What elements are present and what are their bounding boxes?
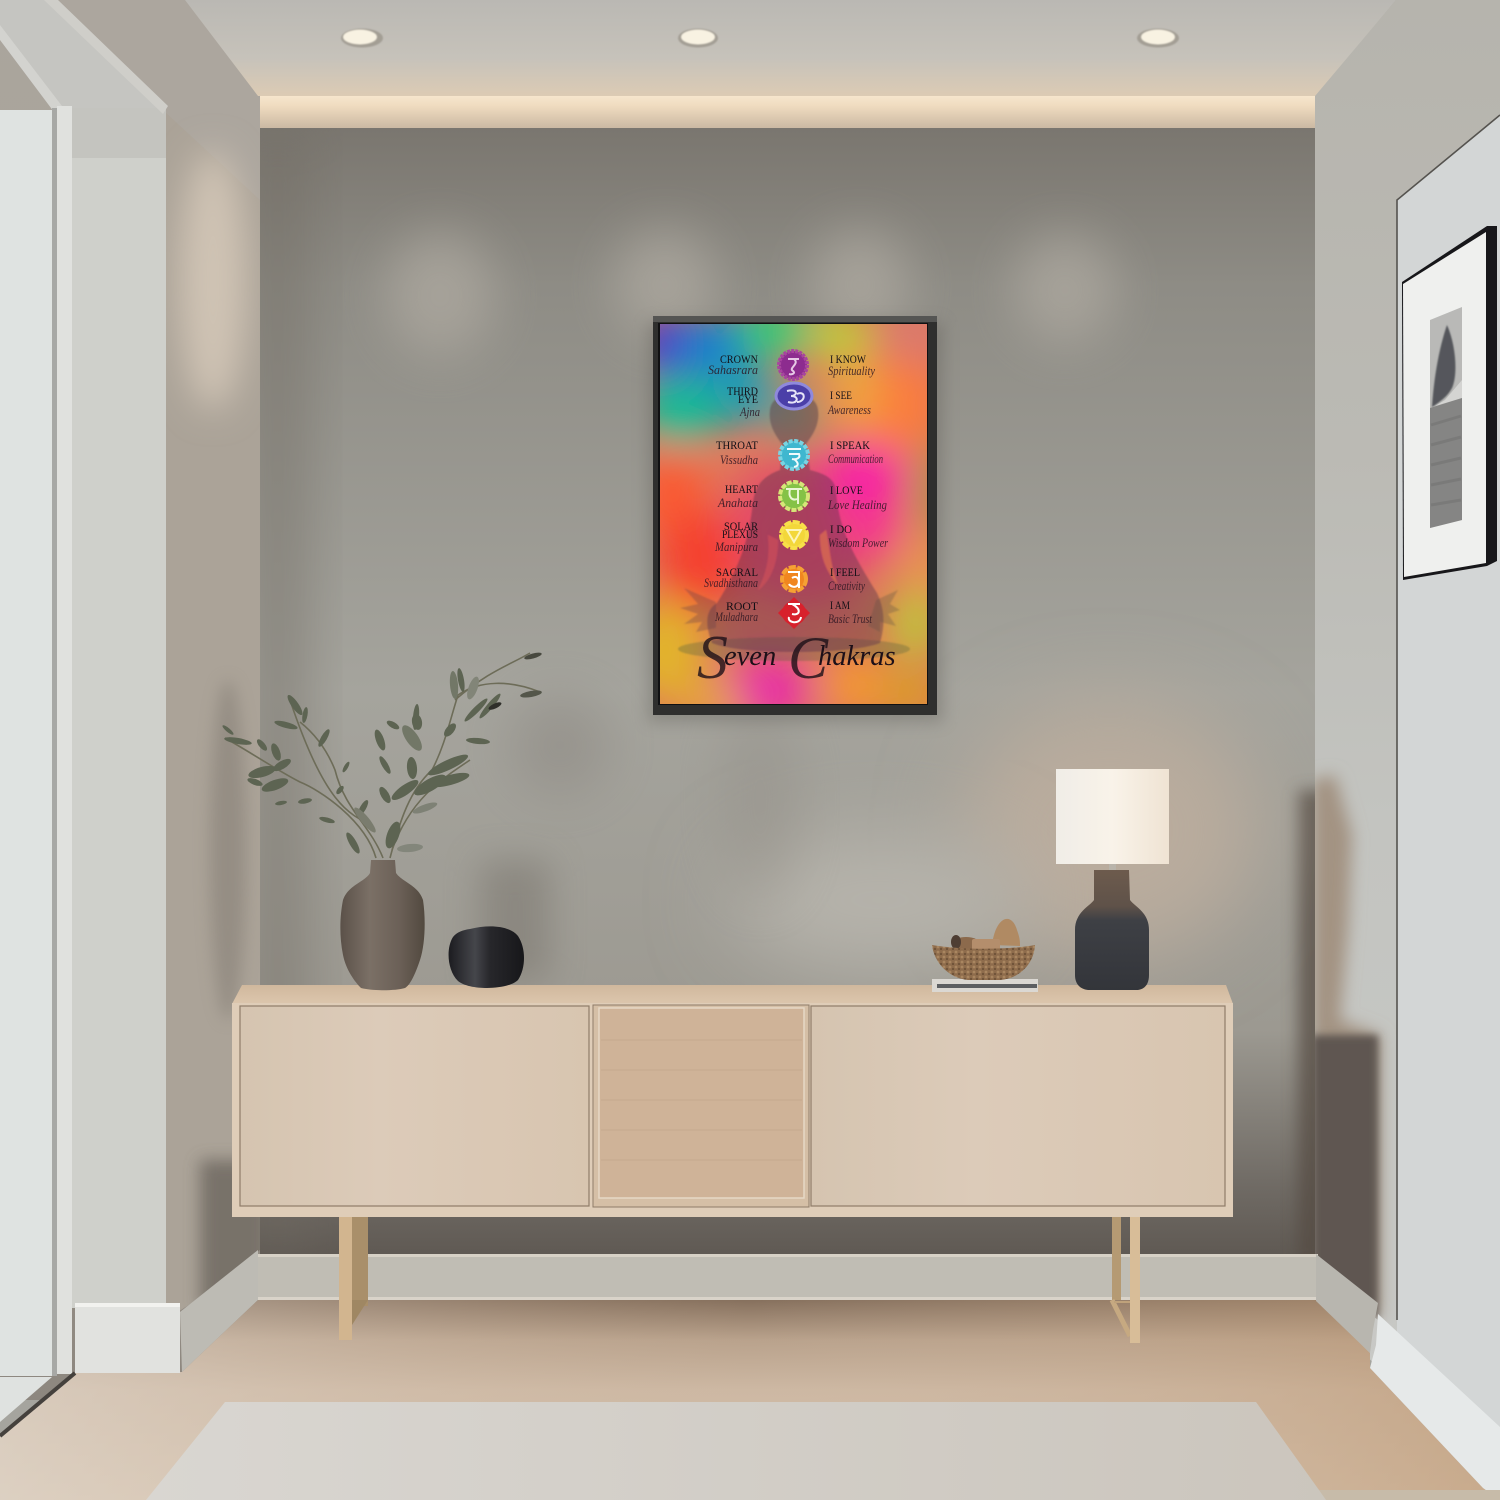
window reveal [0, 0, 168, 1308]
bowl contents [951, 919, 1020, 952]
framed print on right wall [1402, 226, 1497, 580]
floor [0, 1300, 1500, 1500]
poster: seven chakras [660, 324, 927, 704]
label: throat: THROAT [716, 440, 758, 452]
ceiling light 1 [341, 28, 383, 48]
label: I love [827, 485, 887, 512]
soffit above window reveal [0, 0, 165, 112]
left door [240, 1006, 589, 1206]
centre slatted door [593, 1005, 809, 1207]
chakra: third eye [776, 383, 812, 409]
chakra: root [778, 597, 810, 629]
title: Seven Chakras: hakras [818, 641, 896, 672]
label: throat: Vissudha [720, 452, 758, 467]
label: I see [828, 392, 871, 414]
ceiling [185, 0, 1396, 96]
rug [146, 1402, 1500, 1500]
title: Seven Chakras: C [788, 625, 829, 691]
label: crown [708, 356, 758, 374]
label: I do: Wisdom Power [828, 535, 889, 550]
ceiling light 3 [1137, 28, 1179, 48]
table lamp [1056, 769, 1169, 990]
label: I see: Awareness [827, 402, 871, 417]
label: solar plexus: SOLAR [724, 521, 758, 533]
label: I know: I KNOW [830, 354, 866, 366]
side baseboard left [180, 1250, 258, 1372]
label: sacral: SACRAL [716, 567, 758, 579]
window [0, 106, 72, 1422]
poster frame [648, 316, 943, 722]
label: I speak: Communication [828, 451, 883, 466]
label: I am: I AM [830, 600, 850, 612]
bowl and books [932, 919, 1038, 992]
back wall baseboard [258, 1254, 1318, 1300]
left wall trim base [75, 1303, 180, 1373]
light cove strip [260, 96, 1316, 128]
branches [225, 653, 540, 858]
sideboard body [232, 1003, 1233, 1217]
title: Seven Chakras: S [697, 624, 728, 692]
chakra: heart [780, 482, 808, 510]
label: throat [716, 442, 758, 464]
chakra: crown [779, 351, 807, 379]
label: root: ROOT [726, 601, 758, 613]
right wall [1312, 0, 1500, 1500]
label: I see: I SEE [830, 390, 852, 402]
label: third eye: Ajna [739, 404, 760, 419]
sideboard top [232, 985, 1233, 1004]
left labels [704, 354, 760, 624]
label: sacral: Svadhisthana [704, 575, 758, 590]
label: I do: I DO [830, 524, 852, 536]
lampshade [1056, 769, 1169, 864]
poster gradient background [660, 324, 927, 704]
right door [811, 1006, 1225, 1206]
label: root: Muladhara [714, 609, 758, 624]
label: heart: Anahata [717, 495, 758, 510]
woven bowl [932, 945, 1035, 980]
label: root [714, 602, 758, 621]
label: I speak: I SPEAK [830, 440, 871, 452]
books [932, 979, 1038, 992]
back wall [245, 128, 1338, 1265]
label: I know [828, 354, 875, 378]
label: heart: HEART [725, 484, 758, 496]
label: third eye: EYE [738, 394, 758, 406]
label: heart [717, 486, 758, 507]
label: I am [828, 602, 872, 623]
label: I speak [828, 442, 883, 463]
label: third eye [727, 386, 760, 419]
label: solar plexus [714, 521, 758, 554]
label: solar plexus: Manipura [714, 539, 758, 554]
left wall [0, 128, 260, 1400]
right white baseboard [1370, 1314, 1500, 1500]
side baseboard right [1316, 1254, 1378, 1353]
label: I do [828, 526, 888, 547]
chakra: solar plexus [781, 522, 807, 548]
label: I love: Love Healing [827, 497, 887, 512]
label: third eye: THIRD [727, 386, 758, 398]
label: sacral [704, 568, 758, 587]
label: I feel: Creativity [828, 578, 865, 593]
ceiling light 2 [678, 28, 718, 48]
label: solar plexus: PLEXUS [722, 529, 758, 541]
label: crown: CROWN [720, 354, 759, 366]
meditating silhouette [678, 394, 910, 661]
chakra: sacral [782, 567, 806, 591]
label: I feel: I FEEL [830, 567, 860, 579]
chakra: throat [780, 441, 808, 469]
vase body [340, 860, 425, 990]
right labels [827, 354, 889, 626]
label: I know: Spirituality [828, 363, 875, 378]
label: crown: Sahasrara [708, 362, 758, 377]
black ceramic orb [449, 926, 524, 988]
sideboard [232, 985, 1233, 1343]
label: I feel [828, 567, 865, 593]
label: I am: Basic Trust [828, 611, 872, 626]
title: Seven Chakras: even [724, 641, 776, 672]
leaves [221, 651, 542, 855]
lamp base [1075, 870, 1149, 990]
sideboard legs [339, 1216, 1140, 1343]
plant in vase [221, 651, 542, 990]
label: I love: I LOVE [830, 485, 863, 497]
